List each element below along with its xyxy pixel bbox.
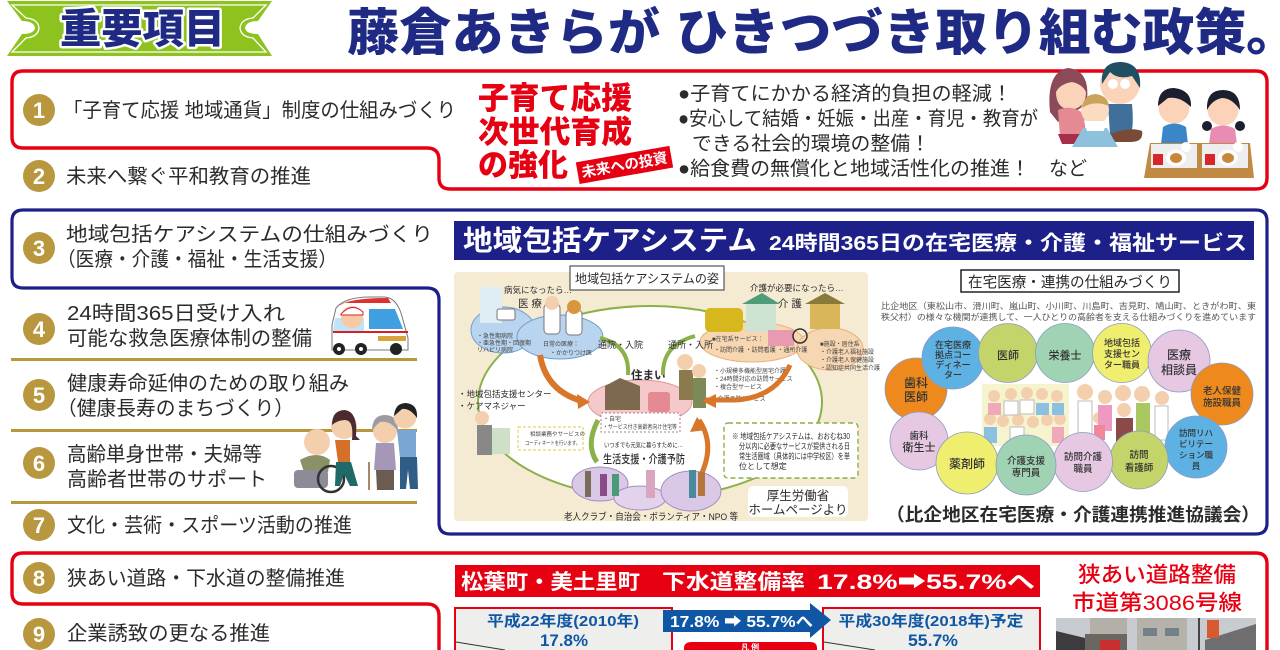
home ellipse: ・自宅	[603, 415, 621, 423]
childcare slogan	[478, 81, 632, 183]
source note	[748, 486, 848, 517]
care ellipses: ・24時間対応の訪問サービス	[714, 375, 793, 383]
icon: children with school lunch	[1144, 88, 1254, 178]
item 3	[23, 223, 433, 271]
source: council name: （比企地区在宅医療・介護連携推進協議会）	[886, 505, 1260, 525]
icon: seniors and caregivers	[294, 403, 418, 492]
diagram: community-based care system	[454, 266, 880, 523]
circle: 歯科医師	[885, 358, 947, 420]
childcare slogan: 次世代育成	[478, 115, 632, 150]
panel frame: infrastructure (red)	[12, 553, 1267, 650]
cooperation description: 比企地区（東松山市、滑川町、嵐山町、小川町、川島町、吉見町、鳩山町、ときがわ町、東	[881, 300, 1256, 311]
item 3: 3	[33, 236, 45, 261]
item 4: 24時間365日受け入れ	[67, 302, 285, 325]
section header: community care system: 地域包括ケアシステム	[463, 225, 757, 256]
note box: 分以内に必要なサービスが提供される日	[739, 441, 850, 451]
item 5	[23, 372, 349, 420]
item 1	[23, 94, 456, 126]
circle: 地域包括支援センター職員	[1092, 324, 1152, 382]
item 8	[23, 562, 345, 594]
item 6: 6	[33, 451, 45, 476]
item 7	[23, 509, 352, 541]
circle: 医師: 医師	[997, 349, 1019, 362]
medical ellipses	[471, 285, 603, 359]
circle: 老人保健施設職員: 施設職員	[1203, 397, 1241, 409]
medical ellipses: 病気になったら…	[504, 285, 572, 295]
care ellipses: ・介護老人福祉施設	[820, 348, 874, 356]
circle: 薬剤師	[936, 432, 998, 494]
item 2	[23, 160, 311, 192]
circle: 地域包括支援センター職員: 支援セン	[1104, 348, 1140, 359]
care manager	[458, 389, 585, 455]
circle: 訪問看護師	[1110, 431, 1168, 489]
diagram title: 地域包括ケアシステムの姿	[575, 271, 719, 286]
panel frame: community care (navy)	[12, 210, 1267, 534]
item 7: 7	[33, 513, 45, 538]
life support ellipses: 老人クラブ・自治会・ボランティア・NPO 等	[564, 511, 738, 523]
arrow: 17.8% to 55.7%	[663, 603, 831, 638]
note box: 常生活圏域（具体的には中学校区）を単	[739, 451, 850, 461]
childcare slogan: の強化	[478, 148, 568, 183]
circle: 医療相談員: 医療	[1167, 347, 1191, 362]
item 7: 文化・芸術・スポーツ活動の推進	[67, 514, 352, 537]
circle: 在宅医療拠点コーディネーター: 拠点コー	[935, 349, 971, 360]
childcare bullet list: ●子育てにかかる経済的負担の軽減！	[678, 83, 1012, 105]
item 9	[23, 618, 270, 650]
diagram: home medical cooperation	[881, 270, 1260, 525]
circle: 介護支援専門員	[996, 435, 1056, 495]
circle: 訪問看護師: 看護師	[1125, 462, 1154, 474]
source note: 厚生労働省	[767, 489, 829, 503]
circle: 訪問リハビリテーション職員: ション職	[1179, 450, 1213, 460]
circle: 薬剤師: 薬剤師	[949, 457, 985, 471]
circle: 介護支援専門員: 介護支援	[1007, 455, 1045, 467]
care ellipses: ・複合型サービス	[714, 383, 762, 391]
circle: 医師	[978, 324, 1038, 382]
home ellipse	[588, 354, 706, 432]
arrow: 17.8% to 55.7%: 17.8% ➡ 55.7%へ	[670, 614, 813, 631]
childcare bullet list: など	[1049, 158, 1087, 180]
narrow road heading: 狭あい道路整備	[1078, 563, 1236, 587]
home ellipse: 住まい	[631, 368, 666, 382]
item 4	[23, 302, 312, 350]
home ellipse: ・サービス付き高齢者向け住宅等	[603, 423, 677, 431]
sewer header	[455, 565, 1040, 597]
circle: 訪問看護師: 訪問	[1129, 449, 1149, 461]
circle: 歯科衛生士	[890, 412, 948, 470]
item 9: 9	[33, 622, 45, 647]
childcare bullet list	[678, 83, 1087, 180]
care ellipses: ・介護老人保健施設	[820, 356, 874, 364]
care manager: ・ケアマネジャー	[458, 401, 526, 411]
note box: ※ 地域包括ケアシステムは、おおむね30	[732, 431, 850, 441]
sewer header: 17.8%➡55.7%へ	[817, 571, 1035, 594]
circle: 訪問リハビリテーション職員: ビリテー	[1179, 439, 1213, 449]
circle: 歯科衛生士: 衛生士	[902, 440, 936, 454]
photo: narrow road	[1056, 618, 1256, 650]
sewer header: 松葉町・美土里町	[461, 571, 640, 594]
circle: 訪問リハビリテーション職員	[1165, 416, 1227, 478]
icon: ambulance	[332, 297, 408, 355]
cooperation description	[881, 300, 1256, 322]
medical ellipses: リハビリ病院	[477, 346, 513, 354]
item 1: 「子育て応援 地域通貨」制度の仕組みづくり	[63, 99, 456, 122]
care ellipses: ■介護予防サービス	[714, 395, 766, 403]
care ellipses: ■在宅系サービス：	[712, 335, 764, 343]
map panel: 2018	[823, 608, 1040, 650]
circle: 訪問リハビリテーション職員: 員	[1192, 461, 1201, 471]
care ellipses	[700, 283, 880, 403]
main title: 藤倉あきらが	[347, 5, 660, 61]
medical ellipses: ・亜急性期・回復期	[477, 339, 531, 347]
note box	[724, 423, 858, 478]
item 3: 地域包括ケアシステムの仕組みづくり	[66, 223, 433, 246]
illustration: medical staff and family	[982, 384, 1169, 446]
item 3: （医療・介護・福祉・生活支援）	[57, 248, 337, 271]
item 8: 狭あい道路・下水道の整備推進	[67, 567, 345, 590]
circle: 歯科医師: 医師	[904, 390, 928, 404]
medical ellipses: ・急性期病院	[477, 332, 513, 340]
tag: 未来への投資: 未来への投資	[580, 148, 669, 181]
item 4: 可能な救急医療体制の整備	[67, 327, 312, 350]
referral arrows	[540, 336, 790, 477]
item 5: （健康長寿のまちづくり）	[57, 397, 294, 420]
cooperation title: 在宅医療・連携の仕組みづくり	[968, 274, 1172, 291]
item 2: 2	[33, 164, 45, 189]
item 4: 4	[33, 317, 46, 342]
childcare bullet list: ●給食費の無償化と地域活性化の推進！	[678, 158, 1030, 180]
source note: ホームページより	[748, 503, 848, 517]
circle: 在宅医療拠点コーディネーター	[922, 327, 984, 389]
childcare bullet list: できる社会的環境の整備！	[692, 133, 930, 155]
circle: 在宅医療拠点コーディネーター: ディネー	[935, 359, 971, 370]
map panel: 2010	[455, 608, 672, 650]
sewer header: 下水道整備率	[662, 571, 805, 594]
life support ellipses	[564, 440, 738, 523]
care loop ellipse	[478, 306, 822, 498]
item 5: 健康寿命延伸のための取り組み	[67, 372, 349, 395]
diagram title	[570, 266, 724, 290]
map panel: 2010: 17.8%	[540, 632, 588, 650]
circle: 訪問リハビリテーション職員: 訪問リハ	[1179, 428, 1213, 438]
item 6	[23, 443, 267, 491]
circle: 訪問介護職員	[1054, 432, 1112, 492]
panel frame: childcare (red)	[12, 71, 1267, 189]
childcare bullet list: ●安心して結婚・妊娠・出産・育児・教育が	[678, 108, 1038, 130]
map panel: 2010: 平成22年度(2010年)	[487, 612, 639, 630]
heading badge: 重要項目	[7, 1, 272, 56]
circle: 歯科衛生士: 歯科	[909, 430, 929, 442]
referral arrows: 通所・入所	[668, 339, 713, 350]
care ellipses: 介護が必要になったら…	[750, 283, 844, 293]
cooperation description: 秩父村）の様々な機関が連携して、一人ひとりの高齢者を支える仕組みづくりを進めています	[881, 311, 1256, 322]
legend	[684, 642, 817, 650]
main title: ひきつづき取り組む政策。	[676, 5, 1280, 61]
item 8: 8	[33, 566, 45, 591]
circle: 栄養士: 栄養士	[1048, 348, 1082, 362]
heading badge: 重要項目: 重要項目	[60, 6, 225, 52]
circle: 老人保健施設職員: 老人保健	[1203, 385, 1241, 397]
care ellipses: ・訪問介護 ・訪問看護 ・通所介護	[714, 346, 807, 354]
care manager: コーディネートを行います。	[525, 439, 580, 447]
care ellipses: 介 護	[778, 297, 802, 310]
care ellipses: ・小規模多機能型居宅介護	[714, 367, 786, 375]
circle: 在宅医療拠点コーディネーター: 在宅医療	[935, 339, 971, 350]
narrow road heading: 市道第3086号線	[1072, 591, 1243, 615]
care manager: 相談業務やサービスの	[530, 430, 585, 438]
item 1: 1	[33, 98, 45, 123]
medical ellipses: 日常の医療：	[543, 340, 579, 348]
circle: 地域包括支援センター職員: ター職員	[1104, 359, 1140, 370]
care ellipses: ・認知症共同生活介護	[820, 364, 880, 372]
section header: community care system: 24時間365日の在宅医療・介護・福祉サービス	[769, 232, 1247, 255]
life support ellipses: 生活支援・介護予防	[603, 452, 685, 466]
narrow road heading	[1072, 563, 1243, 615]
life support ellipses: いつまでも元気に暮らすために…	[604, 440, 683, 449]
circle: 医療相談員	[1148, 330, 1210, 392]
main title	[347, 5, 1280, 61]
circle: 訪問介護職員: 訪問介護	[1064, 451, 1102, 463]
circle: 在宅医療拠点コーディネーター: ター	[944, 369, 962, 380]
circle: 歯科医師: 歯科	[904, 376, 928, 390]
note box: 位として想定	[739, 461, 787, 471]
care manager: ・地域包括支援センター	[458, 389, 552, 399]
item 5: 5	[33, 383, 45, 408]
medical ellipses: ・かかりつけ医	[550, 350, 592, 357]
section header: community care system	[454, 221, 1254, 260]
circle: 医療相談員: 相談員	[1161, 362, 1197, 377]
referral arrows: 通院・入院	[598, 340, 643, 350]
item 2: 未来へ繋ぐ平和教育の推進	[66, 165, 311, 188]
item 6: 高齢単身世帯・夫婦等	[67, 443, 262, 466]
circle: 栄養士	[1036, 324, 1094, 382]
item 9: 企業誘致の更なる推進	[67, 622, 270, 645]
map panel: 2018: 平成30年度(2018年)予定	[838, 612, 1024, 630]
childcare slogan: 子育て応援	[478, 81, 632, 116]
care ellipses: ■施設・居住系	[820, 340, 860, 348]
circle: 訪問介護職員: 職員	[1073, 463, 1093, 475]
circle: 介護支援専門員: 専門員	[1012, 467, 1041, 479]
item 6: 高齢者世帯のサポート	[67, 468, 267, 491]
circle: 地域包括支援センター職員: 地域包括	[1104, 337, 1140, 348]
medical ellipses: 医 療	[518, 297, 542, 310]
circle: 老人保健施設職員	[1191, 363, 1253, 425]
icon: family	[1049, 62, 1142, 147]
map panel: 2018: 55.7%	[908, 632, 958, 650]
